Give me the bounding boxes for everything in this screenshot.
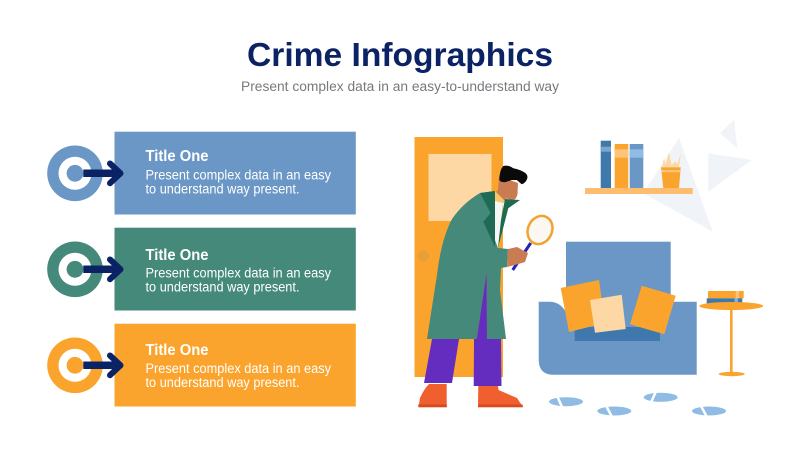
scarf	[495, 191, 505, 204]
panel: item one	[47, 132, 356, 214]
hand	[507, 247, 528, 267]
table leg	[730, 306, 733, 373]
background shards	[643, 120, 752, 232]
card text: Present complex data in an easy	[146, 361, 331, 376]
card text	[146, 167, 331, 196]
shelf board	[585, 188, 693, 194]
footprints	[549, 392, 726, 416]
magnifying glass	[513, 212, 557, 270]
card background	[114, 228, 356, 310]
title: Crime Infographics	[247, 37, 553, 74]
card text: to understand way present.	[146, 280, 300, 295]
books on table	[707, 291, 744, 306]
arrow	[83, 356, 120, 375]
panel: item three	[47, 324, 356, 406]
card background	[114, 132, 356, 214]
arrow	[83, 260, 120, 279]
target icon	[47, 241, 103, 297]
card heading: Title One	[146, 148, 209, 165]
shelf with books	[585, 141, 693, 194]
card text	[146, 361, 331, 390]
table top	[699, 302, 763, 310]
legs	[424, 339, 502, 386]
seat	[575, 327, 660, 341]
armchair	[539, 242, 697, 375]
inner trouser	[477, 272, 487, 339]
shirt	[495, 201, 503, 248]
chair back	[566, 242, 671, 332]
card heading: Title One	[146, 247, 209, 264]
target icon	[47, 338, 103, 393]
neck and face	[495, 176, 518, 203]
table foot	[719, 372, 745, 376]
card text: Present complex data in an easy	[146, 266, 331, 281]
target icon	[47, 146, 103, 201]
card text: to understand way present.	[146, 375, 300, 390]
coat lapels	[480, 191, 520, 248]
chair body	[539, 302, 697, 375]
card heading: Title One	[146, 342, 209, 359]
card background	[114, 324, 356, 406]
pencil cup	[661, 152, 681, 188]
detective figure	[418, 166, 557, 407]
panel: item two	[47, 228, 356, 310]
shoes	[418, 384, 523, 407]
card text	[146, 266, 331, 295]
door	[414, 137, 503, 377]
subtitle: Present complex data in an easy-to-understand way	[241, 79, 559, 94]
books	[601, 141, 643, 188]
coat	[427, 191, 508, 339]
arrow	[83, 164, 120, 183]
side table	[699, 291, 763, 376]
card text: to understand way present.	[146, 181, 300, 196]
cushions	[561, 280, 676, 334]
hair	[499, 166, 527, 184]
card text: Present complex data in an easy	[146, 167, 331, 182]
